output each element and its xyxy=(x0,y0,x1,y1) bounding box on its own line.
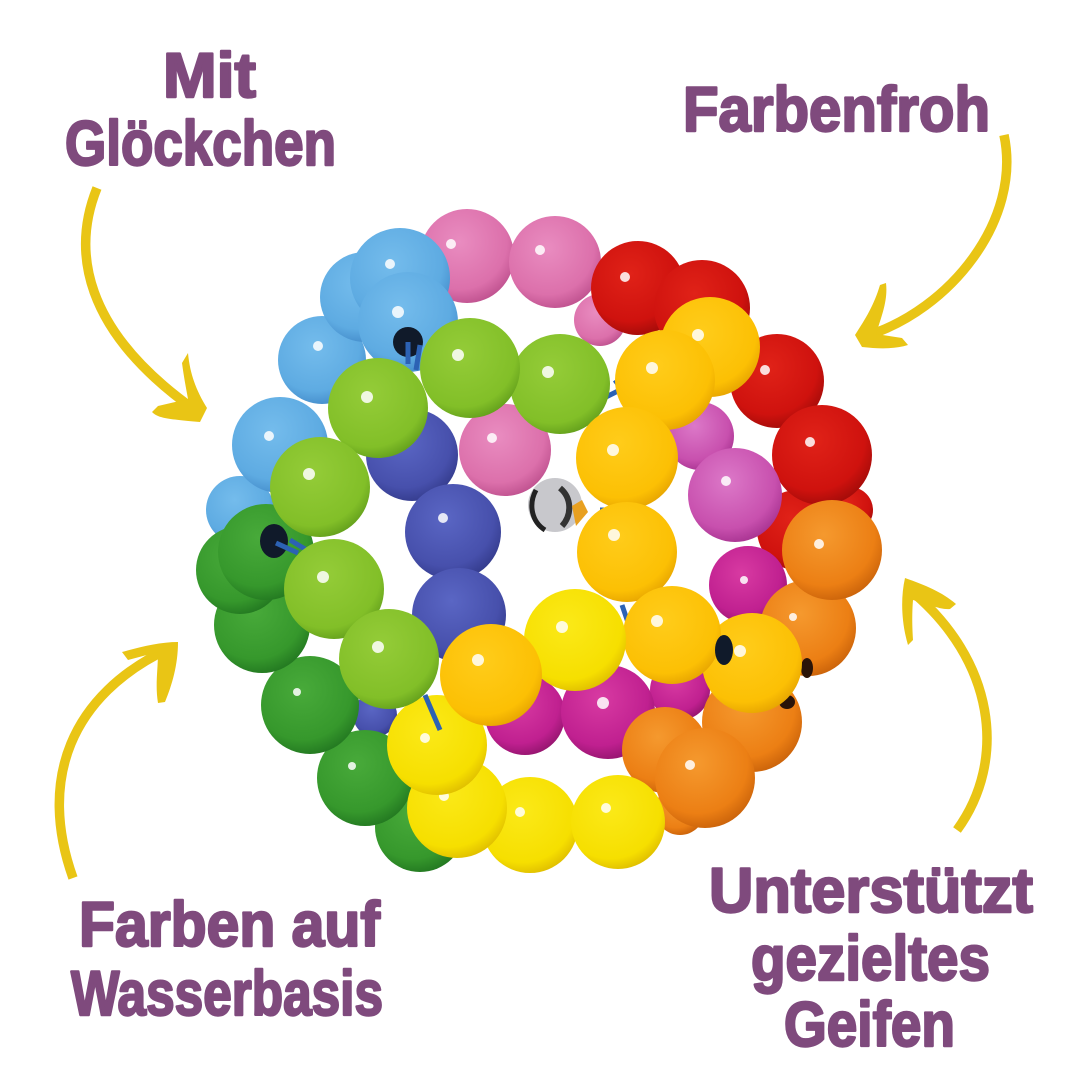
beads: golden yellow xyxy=(576,297,802,713)
beads: red xyxy=(591,241,873,570)
heading: Mit Glöckchen: Mit xyxy=(163,41,256,111)
beads: orchid and magenta xyxy=(459,402,787,759)
heading: Mit Glöckchen: Glöckchen xyxy=(65,109,336,179)
beads: lemon yellow xyxy=(440,589,626,726)
heading: Farben auf Wasserbasis: Farben auf xyxy=(79,890,381,960)
arrow: bottom right xyxy=(902,578,987,830)
cords xyxy=(290,380,658,730)
arrow: top left xyxy=(86,188,207,422)
beads: dark blue back xyxy=(353,693,397,737)
beads: dark blue xyxy=(366,409,506,662)
toy: rainbow bead ball xyxy=(196,209,882,873)
heading: Farbenfroh: Farbenfroh xyxy=(683,75,990,145)
heading: Unterstützt gezieltes Geifen xyxy=(709,856,1033,1060)
arrow: bottom left xyxy=(59,642,178,878)
arrow: top right xyxy=(855,135,1007,348)
heading: Mit Glöckchen xyxy=(65,41,336,179)
heading: Farben auf Wasserbasis: Wasserbasis xyxy=(71,959,383,1029)
bell xyxy=(528,478,588,532)
beads: lime green xyxy=(270,318,610,709)
bead holes xyxy=(260,327,733,665)
beads: orange xyxy=(622,500,882,835)
hole cords xyxy=(276,342,420,553)
orange bead holes xyxy=(779,658,813,709)
heading: Farben auf Wasserbasis xyxy=(71,890,383,1029)
beads: yellow lower xyxy=(387,695,665,873)
heading: Unterstützt gezieltes Geifen: gezieltes xyxy=(751,924,990,994)
beads: dark green xyxy=(196,504,465,872)
beads: light blue xyxy=(206,228,458,544)
heading: Unterstützt gezieltes Geifen: Unterstützt xyxy=(709,856,1033,926)
beads: pink xyxy=(420,209,626,346)
heading: Unterstützt gezieltes Geifen: Geifen xyxy=(784,990,955,1060)
